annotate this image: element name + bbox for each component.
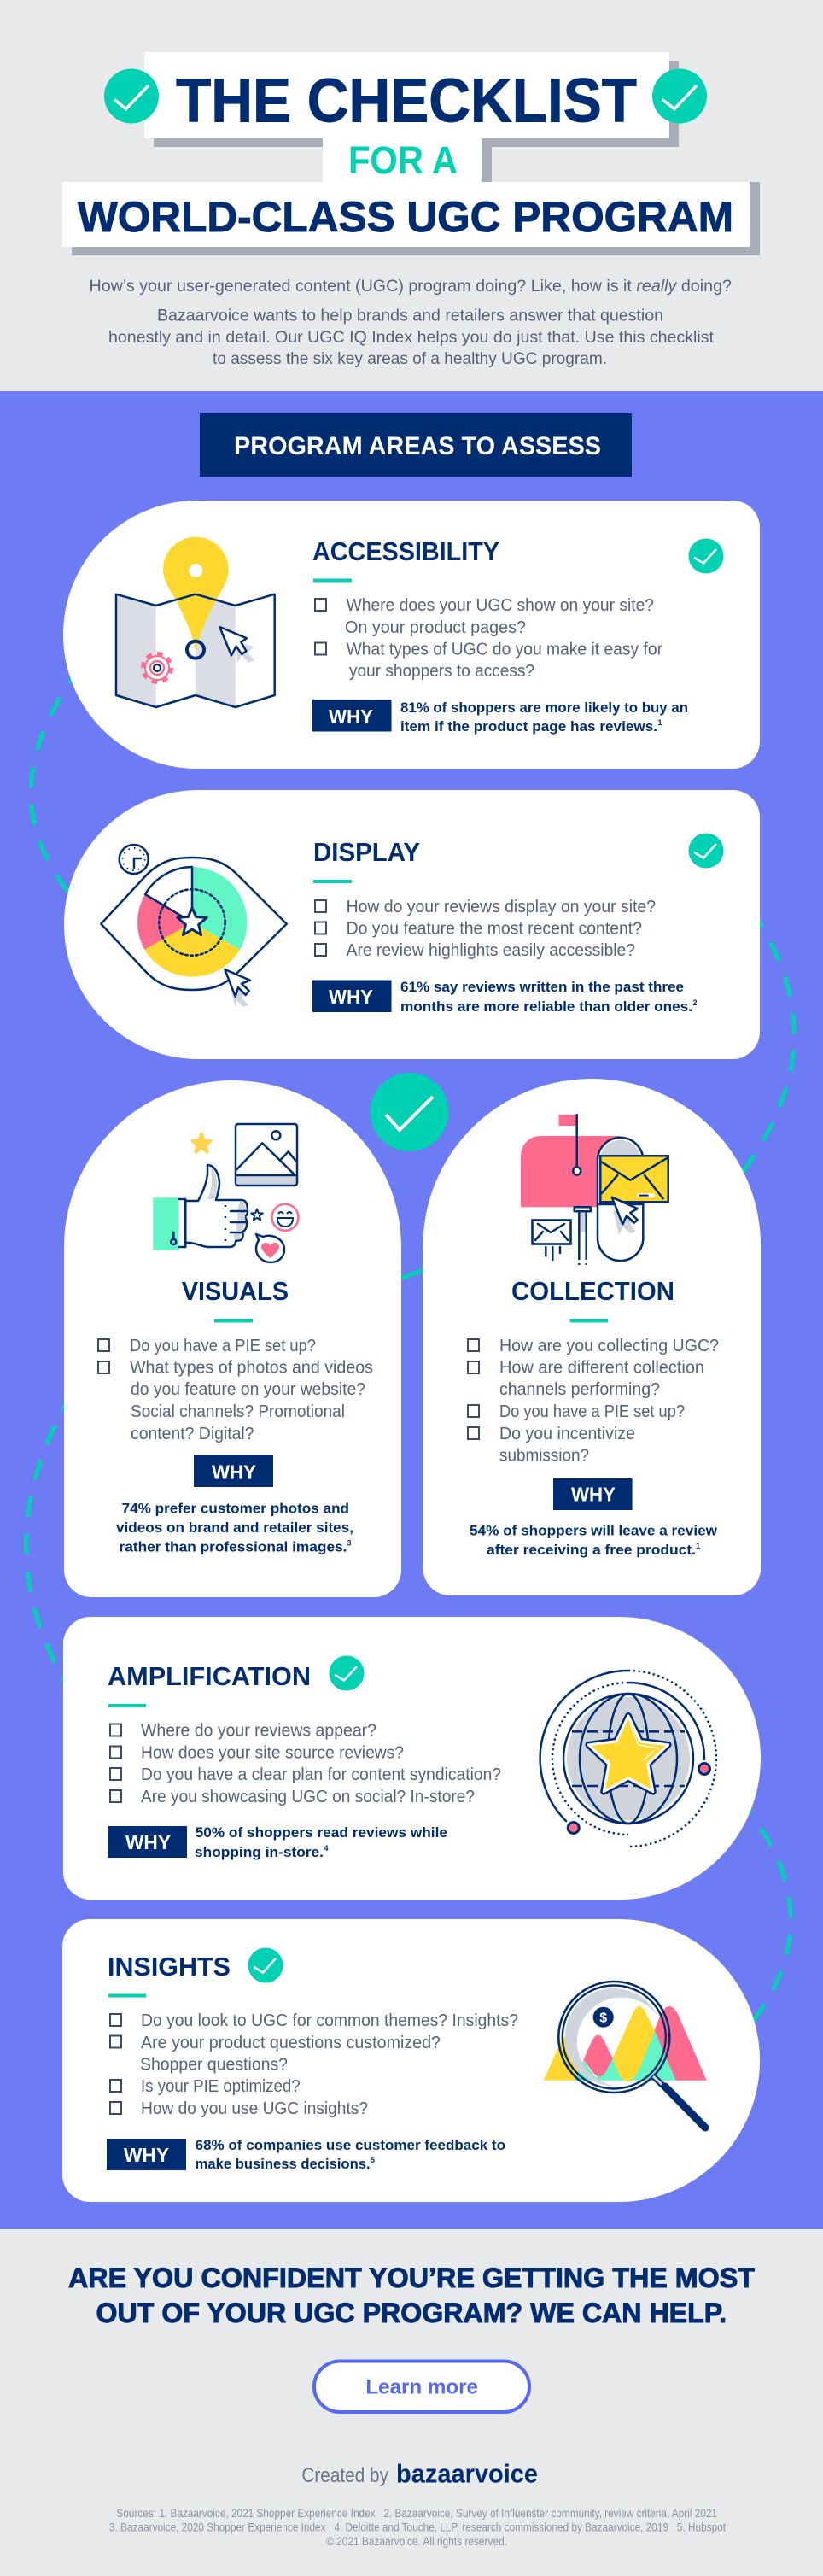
why statistic: 3 [347,1539,352,1548]
why badge: WHY [329,986,373,1008]
why statistic [116,1500,353,1555]
icon: check [688,538,724,574]
checklist [315,898,656,960]
why statistic: videos on brand and retailer sites, [116,1519,353,1536]
why statistic: shopping in-store. [195,1844,324,1860]
why statistic [196,2137,505,2172]
intro text: How’s your user-generated content (UGC) program doing? Like, how is it really doing? [89,277,732,296]
checklist: Do you have a clear plan for content syndication? [141,1765,501,1784]
checklist: Are review highlights easily accessible? [347,941,635,960]
why statistic: 50% of shoppers read reviews while [196,1824,447,1841]
panel: visuals [64,1080,401,1597]
why statistic: 1 [657,718,662,727]
intro text: honestly and in detail. Our UGC IQ Index helps you do just that. Use this checklist [108,328,715,347]
why badge: WHY [212,1461,256,1483]
checklist [110,1721,501,1806]
heading: program areas to assess [200,413,632,477]
accent bar [214,1319,253,1322]
why badge [194,1455,273,1487]
checklist: Social channels? Promotional [131,1402,345,1421]
intro text: to assess the six key areas of a healthy UGC program. [213,349,607,368]
dashed connector path [26,666,794,2029]
why badge [553,1478,633,1510]
checklist [315,596,662,681]
panel: display [64,790,760,1059]
icon: check [248,1947,283,1983]
why statistic: 54% of shoppers will leave a review [470,1523,718,1539]
checklist: channels performing? [499,1380,660,1399]
why statistic: 61% say reviews written in the past three [400,979,684,995]
why badge [312,700,391,731]
checklist: submission? [499,1447,589,1466]
checklist: On your product pages? [345,618,526,637]
checklist: Where do your reviews appear? [141,1721,376,1740]
checklist: content? Digital? [131,1425,254,1443]
checklist: What types of photos and videos [130,1358,373,1377]
checklist: your shoppers to access? [349,662,534,681]
checklist: Are you showcasing UGC on social? In-store? [141,1788,475,1806]
panel: accessibility [63,501,760,769]
intro text: Bazaarvoice wants to help brands and retailers answer that question [157,306,663,325]
accent bar [108,1993,146,1997]
created by bazaarvoice: bazaarvoice [396,2458,538,2489]
why statistic: 74% prefer customer photos and [122,1500,349,1517]
why statistic: make business decisions. [196,2156,371,2172]
checklist: Do you look to UGC for common themes? Insights? [141,2011,518,2030]
icon: title check right [652,68,707,123]
checklist: Are your product questions customized? [141,2034,441,2052]
sources [109,2506,726,2548]
why badge: WHY [329,705,373,728]
icon: magnifier over peaks [544,1982,707,2128]
checklist: Shopper questions? [140,2056,288,2075]
checklist: How do you use UGC insights? [141,2099,368,2118]
title: FOR A [348,138,458,182]
why badge [312,981,391,1012]
checklist: How do your reviews display on your site? [347,898,656,916]
title: WORLD-CLASS UGC PROGRAM [78,193,733,241]
checklist: How are different collection [499,1358,704,1377]
accent bar [570,1319,608,1322]
heading: insights: INSIGHTS [108,1952,231,1982]
heading: amplification: AMPLIFICATION [108,1661,311,1691]
checklist: How does your site source reviews? [141,1744,404,1763]
icon: magnifier over peaks: $ [599,2011,607,2026]
why statistic: 1 [696,1542,700,1550]
created by bazaarvoice: Created by [301,2464,388,2487]
why statistic: 81% of shoppers are more likely to buy an [400,700,688,716]
why statistic [400,979,698,1015]
sources: 3. Bazaarvoice, 2020 Shopper Experience Index 4. Deloitte and Touche, LLP, research commissioned by Bazaarvoice, 2019 5. Hubspot [109,2520,726,2534]
why statistic: 2 [693,998,698,1007]
icon: check [688,834,724,868]
checklist: do you feature on your website? [131,1380,365,1399]
heading: visuals: VISUALS [182,1276,289,1306]
checklist: Do you incentivize [499,1425,635,1443]
heading: display: DISPLAY [313,837,420,867]
icon: map with pin [116,537,275,707]
title [62,52,760,255]
checklist: What types of UGC do you make it easy for [347,641,662,659]
checklist: Do you have a PIE set up? [499,1402,685,1421]
checklist [98,1337,373,1443]
call to action heading [68,2263,755,2328]
button: learn more: Learn more [365,2376,478,2399]
call to action heading: OUT OF YOUR UGC PROGRAM? WE CAN HELP. [96,2298,727,2328]
why statistic: months are more reliable than older ones. [400,998,692,1015]
icon: title check left [104,68,159,123]
why statistic: item if the product page has reviews. [400,718,657,735]
icon: eye with wheel [101,845,287,1008]
panel: collection [423,1079,761,1595]
why statistic [400,700,688,735]
why statistic [470,1523,718,1558]
icon: mailbox [521,1115,668,1265]
call to action heading: ARE YOU CONFIDENT YOU’RE GETTING THE MOST [68,2263,755,2293]
created by bazaarvoice [301,2458,538,2489]
heading: accessibility: ACCESSIBILITY [312,536,499,566]
icon: globe with star [540,1671,716,1847]
sources: Sources: 1. Bazaarvoice, 2021 Shopper Experience Index 2. Bazaarvoice, Survey of Influenster community, review criteria, April 2021 [116,2506,717,2520]
title: THE CHECKLIST [176,67,637,135]
intro text [89,277,732,368]
why statistic: 68% of companies use customer feedback to [196,2137,505,2153]
why badge [107,2139,186,2170]
checklist: Is your PIE optimized? [141,2077,301,2096]
heading: collection: COLLECTION [511,1276,674,1306]
why badge: WHY [571,1484,616,1506]
accent bar [108,1704,146,1707]
checklist: Do you feature the most recent content? [347,919,642,938]
why badge [108,1826,187,1858]
why badge: WHY [124,2144,169,2166]
checklist: How are you collecting UGC? [499,1337,719,1355]
icon: large check [371,1073,449,1151]
why statistic: rather than professional images. [120,1539,347,1555]
sources: © 2021 Bazaarvoice. All rights reserved. [326,2534,507,2548]
checklist: Do you have a PIE set up? [130,1337,316,1355]
why badge: WHY [125,1831,171,1853]
icon: check [330,1655,364,1691]
accent bar [313,579,352,583]
why statistic: 5 [371,2156,375,2164]
why statistic: after receiving a free product. [487,1542,696,1558]
panel: amplification [63,1617,761,1900]
checklist [468,1337,719,1466]
accent bar [313,880,352,883]
button: learn more [314,2361,529,2412]
checklist [110,2011,518,2118]
why statistic [195,1824,447,1860]
why statistic: 4 [324,1844,329,1853]
panel: program areas background [0,391,823,2229]
panel: insights [62,1919,760,2202]
heading: program areas to assess: PROGRAM AREAS TO ASSESS [234,432,601,460]
checklist: Where does your UGC show on your site? [347,596,654,615]
icon: thumbs up and social [153,1124,299,1262]
